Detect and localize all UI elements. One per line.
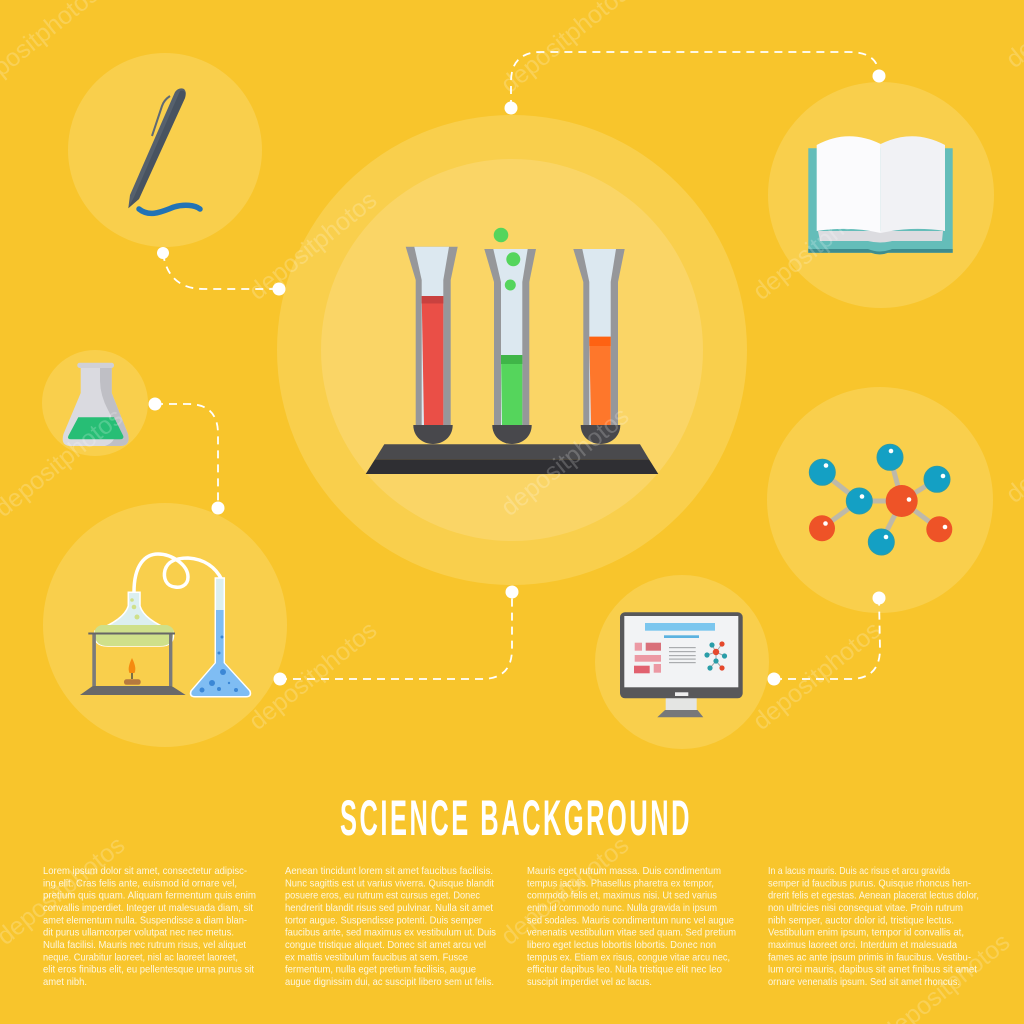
text column 1: ing elit. Cras felis ante, euismod id ornare vel,: [43, 878, 237, 889]
text column 4: maximus laoreet orci. Interdum et malesuada: [768, 940, 957, 951]
text column 3: venenatis vestibulum vitae sed quam. Sed pretium: [527, 928, 736, 939]
icon: pen: [128, 88, 200, 213]
text column 3: commodo felis et, maximus nisi. Ut sed varius: [527, 891, 717, 902]
text column 4: drerit felis et egestas. Aenean placerat lectus dolor,: [768, 891, 979, 902]
dashed connector: pen to centre: [163, 253, 278, 289]
text column 2: congue tristique aliquet. Donec sit amet arcu vel: [285, 940, 486, 951]
dashed connector: monitor to molecule: [774, 598, 880, 679]
connector dots: [148, 70, 886, 686]
green test tube: [484, 228, 536, 444]
text column 2: [285, 866, 496, 988]
red test tube: [406, 247, 458, 444]
text column 3: suscipit imperdiet vel ac lacus.: [527, 977, 652, 988]
text column 1: convallis imperdiet. Integer ut malesuada diam, sit: [43, 903, 253, 914]
text column 2: fermentum, nulla eget pretium facilisis, augue: [285, 965, 476, 976]
circle: small flask: [42, 350, 148, 456]
circle: distillation: [43, 503, 287, 747]
text column 2: Aenean tincidunt lorem sit amet faucibus facilisis.: [285, 866, 493, 877]
watermark: depositphotos: [496, 402, 634, 522]
text column 3: enim id commodo nunc. Nulla gravida in ipsum: [527, 903, 717, 914]
icon: open book: [808, 136, 953, 254]
text column 2: posuere eros, eu rutrum est cursus eget. Donec: [285, 891, 480, 902]
text column 3: sed sodales. Mauris condimentum nunc vel augue: [527, 915, 734, 926]
orange test tube: [573, 249, 625, 444]
watermark: depositphotos: [244, 616, 382, 736]
dashed connector: distillation to centre: [279, 592, 512, 679]
pen ink squiggle: [139, 205, 200, 213]
text column 3: tempus ex. Etiam ex risus, congue vitae arcu nec,: [527, 952, 730, 963]
watermark: depositphotos: [244, 186, 382, 306]
text column 3: Mauris eget rutrum massa. Duis condimentum: [527, 866, 721, 877]
tripod stand and burner: [80, 632, 186, 695]
text column 4: ornare venenatis ipsum. Sed sit amet rhoncus.: [768, 977, 960, 988]
text column 1: amet elementum nulla. Suspendisse a diam blan-: [43, 915, 247, 926]
text column 2: tortor augue. Suspendisse potenti. Duis semper: [285, 915, 483, 926]
text column 3: tempus iaculis. Phasellus pharetra ex tempor,: [527, 878, 714, 889]
text column 1: dit purus ullamcorper volutpat nec nec metus.: [43, 928, 234, 939]
icon: molecule: [809, 444, 952, 555]
text column 4: semper id faucibus purus. Quisque rhoncus hen-: [768, 878, 971, 889]
circle: monitor: [595, 575, 769, 749]
watermark: depositphotos: [748, 186, 886, 306]
text column 4: non ultricies nisi consequat vitae. Proin rutrum: [768, 903, 963, 914]
text column 2: augue dignissim dui, ac suscipit libero sem ut felis.: [285, 977, 494, 988]
circle: pen: [68, 53, 262, 247]
coiled tube: [134, 554, 222, 592]
text column 1: neque. Curabitur laoreet, nisl ac laoreet laoreet,: [43, 952, 238, 963]
text column 4: fames ac ante ipsum primis in faucibus. Vestibu-: [768, 952, 971, 963]
rack base: [366, 444, 658, 474]
text column 1: [43, 866, 256, 988]
text column 2: faucibus ante, sed maximus ex vestibulum ut. Duis: [285, 928, 496, 939]
text column 4: In a lacus mauris. Duis ac risus et arcu gravida: [768, 866, 950, 877]
icon: test tube rack: [366, 228, 658, 474]
watermark: depositphotos: [748, 616, 886, 736]
dashed connector: centre to book: [511, 52, 879, 108]
icon: distillation apparatus: [80, 554, 250, 697]
icon: computer monitor: [620, 612, 743, 717]
circle: book: [768, 82, 994, 308]
text column 1: amet nibh.: [43, 977, 87, 988]
text column 1: pretium quis quam. Aliquam fermentum quis enim: [43, 891, 256, 902]
text column 4: Vestibulum enim ipsum, tempor id convallis at,: [768, 928, 964, 939]
central double circle: [277, 115, 747, 585]
watermark: depositphotos: [496, 831, 634, 951]
text column 4: lum orci mauris, dapibus sit amet finibus sit amet: [768, 965, 977, 976]
circle: molecule: [767, 387, 993, 613]
title: SCIENCE BACKGROUND: [340, 790, 692, 846]
text column 1: Lorem ipsum dolor sit amet, consectetur adipisc-: [43, 866, 247, 877]
text column 2: Nunc sagittis est ut varius viverra. Quisque blandit: [285, 878, 494, 889]
text column 1: elit eros finibus elit, eu pellentesque urna purus sit: [43, 965, 254, 976]
text column 3: efficitur dapibus leo. Nulla tristique elit nec leo: [527, 965, 722, 976]
text column 3: libero eget lectus lobortis lobortis. Donec non: [527, 940, 716, 951]
text column 4: nibh semper, auctor dolor id, tristique lectus.: [768, 915, 954, 926]
dashed connector: flask to distillation: [155, 404, 218, 508]
text column 3: [527, 866, 736, 988]
text column 2: ex mattis vestibulum faucibus at sem. Fusce: [285, 952, 468, 963]
text column 2: hendrerit blandit risus sed pulvinar. Nulla sit amet: [285, 903, 493, 914]
heated flask: [95, 592, 174, 646]
icon: small green flask: [63, 363, 129, 446]
text column 4: [768, 866, 979, 988]
receiving flask: [190, 578, 250, 697]
text column 1: Nulla facilisi. Mauris nec rutrum risus, vel aliquet: [43, 940, 246, 951]
